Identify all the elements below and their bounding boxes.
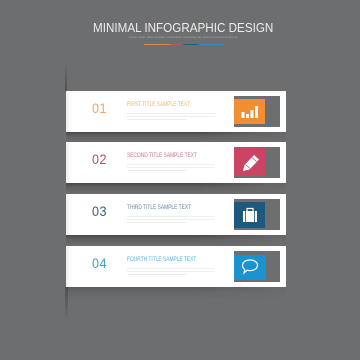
- icon backing: [234, 96, 280, 127]
- left fold shadow above cards: [65, 62, 67, 91]
- icon backing: [234, 199, 280, 230]
- icon: speech bubble: [234, 255, 266, 280]
- third title: THIRD TITLE SAMPLE TEXT: [127, 204, 191, 211]
- number 02: 02: [92, 151, 107, 167]
- left fold shadow below cards: [65, 287, 68, 321]
- icon backing: [234, 147, 280, 178]
- band shadow between cards: [66, 235, 286, 242]
- icon: briefcase: [234, 202, 265, 228]
- first title: FIRST TITLE SAMPLE TEXT: [127, 101, 190, 108]
- band shadow between cards: [66, 132, 286, 138]
- band shadow between cards: [66, 183, 286, 190]
- icon: bar chart: [234, 99, 265, 124]
- shadow below last card: [68, 287, 256, 292]
- number 01: 01: [92, 100, 107, 116]
- panel: third card: [66, 194, 286, 235]
- fourth title: FOURTH TITLE SAMPLE TEXT: [127, 256, 196, 263]
- second title: SECOND TITLE SAMPLE TEXT: [127, 152, 197, 159]
- colored title rule: [144, 44, 224, 45]
- panel: second card: [66, 142, 286, 183]
- panel: first card: [66, 91, 286, 132]
- icon: pencil: [234, 148, 265, 176]
- subtitle: Lorem ipsum dolor sit amet, consectetur adipiscing elit, sed do eiusmod tempor ut: [129, 35, 237, 39]
- title: MINIMAL INFOGRAPHIC DESIGN: [93, 20, 273, 35]
- panel: fourth card: [66, 246, 286, 287]
- number 04: 04: [92, 255, 107, 271]
- number 03: 03: [92, 203, 107, 219]
- icon backing: [234, 251, 280, 282]
